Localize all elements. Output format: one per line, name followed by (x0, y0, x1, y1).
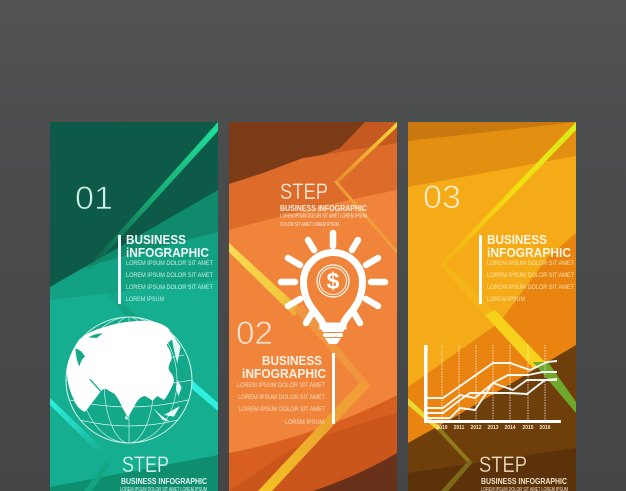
step heading 1: STEP (122, 452, 169, 477)
line chart: 2011 (454, 425, 465, 431)
text block: business infographic 3: LOREM IPSUM (487, 297, 525, 303)
step heading 1: BUSINESS INFOGRAPHIC (121, 476, 207, 486)
step heading 2: LOREM IPSUM DOLOR SIT AMET LOREM IPSUM (280, 214, 367, 220)
line chart: 2012 (470, 425, 482, 431)
globe (66, 317, 192, 443)
line chart: 2013 (487, 425, 499, 431)
text block: business infographic 2: LOREM IPSUM (285, 420, 324, 426)
text block: business infographic 3: iNFOGRAPHIC (487, 245, 572, 260)
panel: step 03 yellow (408, 122, 576, 491)
text block: business infographic 1: LOREM IPSUM DOLOR SIT AMET (126, 261, 213, 267)
text block: business infographic 2: BUSINESS (262, 353, 322, 368)
text block: business infographic 2: LOREM IPSUM DOLOR SIT AMET (239, 407, 325, 413)
step heading 1 (120, 456, 207, 491)
text block: business infographic 1: BUSINESS (126, 232, 186, 247)
step heading 2 (280, 184, 367, 226)
text block: business infographic 1: LOREM IPSUM DOLOR SIT AMET (126, 273, 213, 279)
text block: business infographic 2 (237, 353, 335, 426)
step heading 2: DOLOR SIT AMET LOREM IPSUM (280, 222, 339, 228)
number 01: 01 (75, 180, 113, 216)
text block: business infographic 1: LOREM IPSUM (126, 297, 164, 303)
line chart: 2016 (539, 425, 551, 431)
line chart (424, 345, 561, 431)
icon: light bulb (281, 233, 385, 344)
text block: business infographic 3: LOREM IPSUM DOLOR SIT AMET (487, 261, 574, 267)
text block: business infographic 2: iNFOGRAPHIC (242, 366, 327, 381)
panel: step 01 green (50, 122, 218, 491)
text block: business infographic 1 (118, 232, 213, 304)
text block: business infographic 3 (479, 232, 574, 304)
step heading 2: STEP (280, 179, 328, 204)
text block: business infographic 2: LOREM IPSUM DOLOR SIT AMET (237, 383, 325, 389)
text block: business infographic 3: LOREM IPSUM DOLOR SIT AMET (487, 285, 574, 291)
line chart: 2014 (504, 425, 516, 431)
step heading 2: BUSINESS INFOGRAPHIC (280, 203, 367, 213)
number 03: 03 (423, 179, 461, 215)
text block: business infographic 1: LOREM IPSUM DOLOR SIT AMET (126, 285, 213, 291)
text block: business infographic 2: LOREM IPSUM DOLOR SIT AMET (238, 395, 325, 401)
icon: light bulb: $ (327, 268, 340, 294)
step heading 3: BUSINESS INFOGRAPHIC (481, 476, 567, 486)
step heading 3 (480, 456, 568, 491)
line chart: 2015 (522, 425, 534, 431)
line chart: 2010 (436, 425, 448, 431)
panel: step 02 orange (229, 122, 397, 491)
number 02: 02 (236, 315, 273, 351)
step heading 3: STEP (479, 452, 527, 477)
text block: business infographic 1: iNFOGRAPHIC (126, 245, 210, 260)
text block: business infographic 3: LOREM IPSUM DOLOR SIT AMET (487, 273, 574, 279)
text block: business infographic 3: BUSINESS (487, 232, 547, 247)
